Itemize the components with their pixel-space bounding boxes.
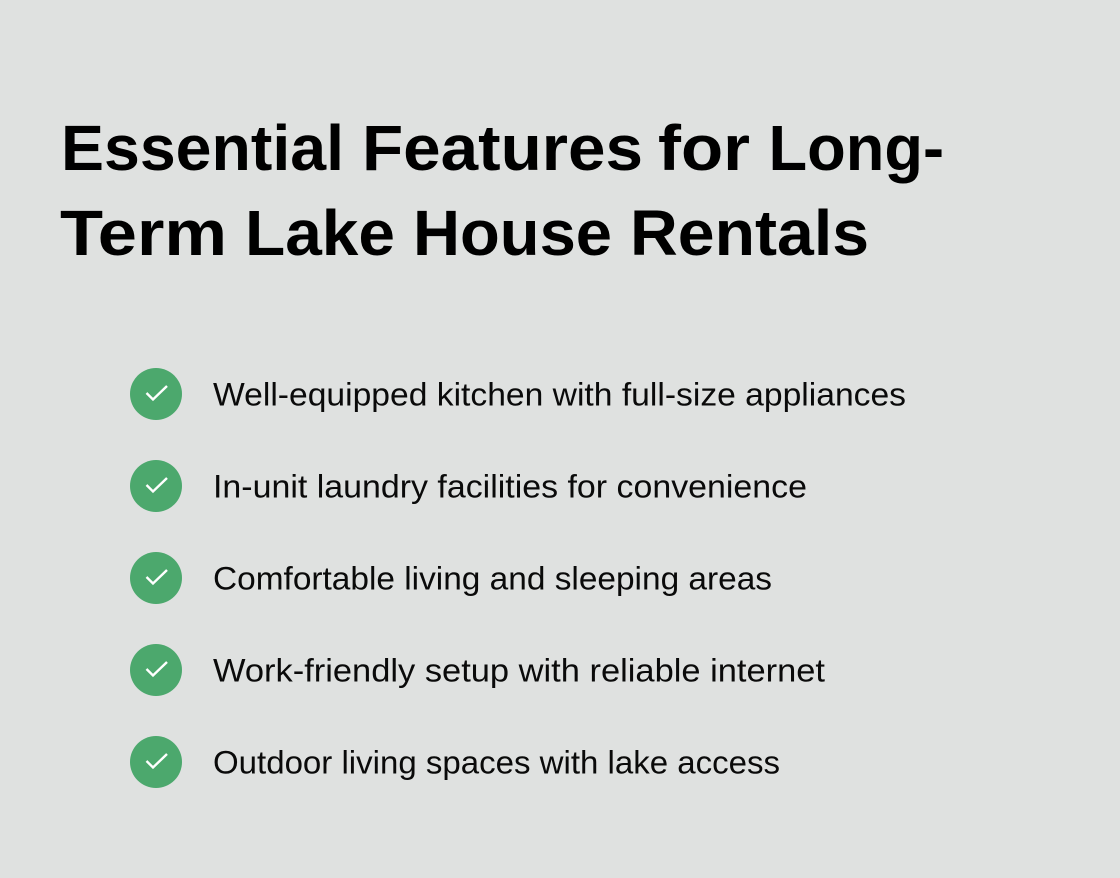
title: House xyxy=(413,197,612,269)
list item: outdoor spaces xyxy=(130,736,780,788)
list item: work setup xyxy=(130,644,825,696)
list item: kitchen xyxy=(130,368,906,420)
feature list xyxy=(130,368,906,788)
title: Long- xyxy=(768,112,944,184)
title: Features xyxy=(362,112,643,184)
title: Essential xyxy=(61,112,344,184)
list item: kitchen: Well-equipped kitchen with full-size appliances xyxy=(213,376,906,412)
title: for xyxy=(658,112,750,184)
title: Lake xyxy=(245,197,395,269)
title xyxy=(60,112,944,269)
list item: living areas xyxy=(130,552,772,604)
title: Rentals xyxy=(630,197,869,269)
list item: laundry xyxy=(130,460,807,512)
list item: living areas: Comfortable living and sleeping areas xyxy=(213,560,772,596)
title: Term xyxy=(60,197,227,269)
list item: outdoor spaces: Outdoor living spaces with lake access xyxy=(213,744,780,780)
list item: work setup: Work-friendly setup with reliable internet xyxy=(213,652,825,688)
list item: laundry: In-unit laundry facilities for convenience xyxy=(213,468,807,504)
